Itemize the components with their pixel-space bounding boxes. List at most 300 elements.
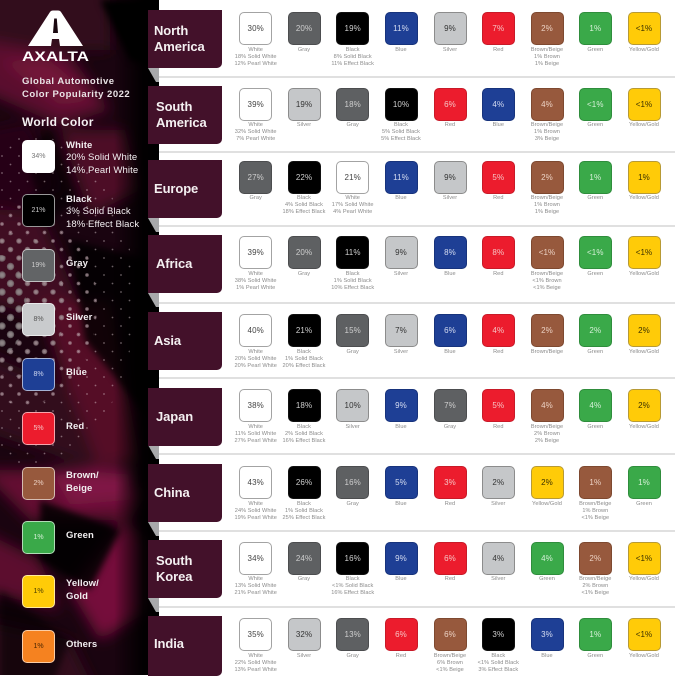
swatch: Silver 2%: Silver [491,501,505,507]
swatch: Silver 32% [276,618,332,660]
legend: White 34%: 20% Solid White [66,152,137,163]
swatch: Silver 2% [470,466,526,508]
legend: Yellow/Gold 1%: Gold [66,590,88,602]
swatch: Black 22%: Black [297,195,311,201]
swatch: Silver 9%: 9% [444,24,456,33]
swatch: White 40%: 20% Solid White [235,356,277,362]
legend: Red 5% [22,412,84,445]
region label: South America: South [156,99,192,114]
swatch: Gray 20% [276,236,332,278]
swatch: Green 1%: 1% [589,630,601,639]
swatch: Black 19% [331,12,374,66]
swatch: Red 7% [482,12,515,52]
swatch: Yellow/Gold <1%: <1% [636,24,652,33]
swatch: Yellow/Gold 1%: 1% [638,173,650,182]
swatch: Brown/Beige 2%: 1% Beige [535,60,559,66]
swatch: Red 6% [434,88,467,128]
swatch: Blue 11%: 11% [393,173,409,182]
swatch: Yellow/Gold <1%: Yellow/Gold [629,122,659,128]
swatch: Green 4%: Green [587,424,603,430]
swatch: Yellow/Gold 2%: Yellow/Gold [629,424,659,430]
swatch: Brown/Beige 4%: 1% Brown [534,129,560,135]
logo: Axalta: AXALTA [22,49,89,64]
swatch: Red 4%: Red [493,349,504,355]
swatch: Brown/Beige 2%: Brown/Beige [531,46,563,52]
legend: Blue 8%: Blue [66,367,87,378]
swatch: Black 19%: 19% [345,24,361,33]
swatch: Green 1%: Green [587,652,603,658]
swatch: Red 8%: 8% [492,248,504,257]
swatch: Green <1% [567,236,623,278]
swatch: Gray 7%: 7% [444,401,456,410]
report title: Color Popularity 2022 [22,89,130,100]
swatch: Black 21%: 1% Solid Black [285,356,323,362]
swatch: Yellow/Gold 2% [616,314,672,356]
swatch: Gray 13% [325,618,381,660]
swatch: Green 1% [616,466,672,508]
swatch: Gray 20%: 20% [296,248,312,257]
swatch: Yellow/Gold <1%: <1% [636,248,652,257]
region label: Europe: Europe [154,181,198,196]
sidebar background: silk and halftone dots [0,0,159,675]
swatch: Silver 32%: 32% [296,630,312,639]
swatch: Black 18%: 16% Effect Black [282,438,325,444]
swatch: Blue 9%: 9% [395,401,407,410]
swatch: Red 6%: 6% [444,554,456,563]
swatch: Brown/Beige 2% [567,542,623,597]
swatch: Yellow/Gold 2%: 2% [638,401,650,410]
legend: Others 1%: Others [66,639,97,650]
region label: China [148,464,222,522]
swatch: Silver 10% [325,389,381,430]
swatch: Green 1%: Green [587,195,603,201]
swatch: Silver 7% [373,314,429,356]
swatch: White 43%: 19% Pearl White [234,515,277,521]
swatch: Red 5%: 5% [492,401,504,410]
swatch: Green 4% [519,542,575,583]
swatch: White 34%: 34% [248,554,264,563]
swatch: Blue 11%: 11% [393,24,409,33]
swatch: Gray 24% [276,542,332,583]
swatch: Blue 11%: Blue [395,195,407,201]
swatch: Red 6% [373,618,429,660]
region label: South America [148,86,222,144]
swatch: Blue 5% [373,466,429,508]
swatch: Black 22% [276,161,332,216]
swatch: Blue 9%: 9% [395,554,407,563]
swatch: Black 21%: 20% Effect Black [282,363,325,369]
swatch: Blue 11%: Blue [395,46,407,52]
swatch: White 35%: 22% Solid White [235,660,277,666]
swatch: Brown/Beige 2%: 1% Brown [534,202,560,208]
swatch: Brown/Beige 4%: 4% [541,100,553,109]
swatch: Blue 11% [385,12,418,52]
swatch: Green 1% [567,161,623,202]
swatch: Yellow/Gold 2%: Yellow/Gold [532,501,562,507]
swatch: Brown/Beige 1%: 1% Brown [582,508,608,514]
swatch: Green <1%: <1% [587,100,604,109]
region label: South America: America [156,115,207,130]
swatch: Black 22%: 4% Solid Black [285,202,323,208]
swatch: Gray 13%: 13% [345,630,361,639]
swatch: White 35%: White [248,652,263,658]
swatch: Brown/Beige 4%: 3% Beige [535,136,559,142]
swatch: Red 5% [470,389,526,430]
swatch: Blue 6%: Blue [444,349,456,355]
swatch: White 30%: 12% Pearl White [234,60,277,66]
swatch: White 21%: 4% Pearl White [333,209,372,215]
swatch: Green 2%: Green [587,349,603,355]
swatch: Green 1%: Green [587,46,603,52]
legend: Yellow/Gold 1%: 1% [33,588,44,595]
swatch: Black 16% [325,542,381,597]
swatch: Black 3% [470,618,526,674]
swatch: Black 26%: 26% [296,478,312,487]
swatch: Silver 9% [434,12,467,52]
legend: Black 21%: 18% Effect Black [66,218,139,230]
swatch: Yellow/Gold 2%: Yellow/Gold [629,349,659,355]
swatch: White 38%: 38% [248,401,264,410]
swatch: Brown/Beige 2% [519,161,575,216]
swatch: Blue 5%: Blue [395,501,407,507]
region label: North America: America [154,39,205,54]
swatch: Silver 32%: Silver [297,652,311,658]
swatch: White 21% [325,161,381,216]
swatch: White 38%: 27% Pearl White [234,438,277,444]
legend: Red 5%: 5% [33,425,44,432]
swatch: Brown/Beige 2%: 2% [541,24,553,33]
swatch: White 40% [228,314,284,370]
swatch: Green 4%: Green [539,576,555,582]
heading: World Color: World Color [22,115,94,129]
legend: White 34%: 34% [31,153,46,160]
swatch: White 39%: White [248,270,263,276]
swatch: Red 4%: 4% [492,326,504,335]
swatch: White 34%: 13% Solid White [235,583,277,589]
swatch: Gray 18%: Gray [347,122,359,128]
swatch: Silver 9%: Silver [443,195,457,201]
swatch: Brown/Beige 1% [567,466,623,522]
swatch: Red 8%: Red [493,270,504,276]
swatch: White 39% [228,236,284,292]
swatch: Silver 2%: 2% [492,478,504,487]
region label: Africa: Africa [156,256,192,271]
legend: Brown/Beige 2% [22,467,99,500]
panel fold: Africa [148,293,159,307]
swatch: Brown/Beige <1%: <1% Beige [533,284,561,290]
swatch: Black 22%: 18% Effect Black [282,209,325,215]
swatch: Gray 15% [325,314,381,356]
swatch: Black 21% [276,314,332,370]
swatch: Red 6%: 6% [444,100,456,109]
legend: White 34%: White [66,140,92,150]
legend: Red 5%: Red [66,421,84,432]
legend: Black 21%: 21% [31,207,46,214]
swatch: White 43%: 24% Solid White [235,508,277,514]
swatch: Red 8% [470,236,526,278]
legend: Silver 8%: Silver [66,312,92,323]
swatch: Red 3%: Red [445,501,455,507]
swatch: White 38%: 11% Solid White [235,430,276,436]
swatch: Brown/Beige 2%: 1% Brown [534,54,560,60]
swatch: Green 2%: 2% [589,326,601,335]
swatch: Green <1%: <1% [587,248,604,257]
swatch: Black 16%: 16% Effect Black [331,590,374,596]
legend: Gray 19%: 19% [31,262,46,269]
region label: India: India [154,636,184,651]
swatch: Gray 27%: 27% [248,173,264,182]
swatch: White 35% [228,618,284,674]
swatch: White 34% [228,542,284,597]
swatch: Black 19%: 8% Solid Black [334,54,372,60]
swatch: White 43%: 43% [248,478,264,487]
legend: Yellow/Gold 1% [22,575,99,608]
swatch: Black 11%: 1% Solid Black [334,278,372,284]
swatch: Gray 27%: Gray [250,195,262,201]
swatch: Brown/Beige 2%: Brown/Beige [531,349,563,355]
swatch: Silver 4%: Silver [491,576,505,582]
swatch: Brown/Beige 4%: Brown/Beige [531,122,563,128]
swatch: Brown/Beige 4%: 2% Beige [535,438,559,444]
swatch: Yellow/Gold 2%: 2% [541,478,553,487]
swatch: Blue 8% [422,236,478,278]
swatch: Brown/Beige 1%: <1% Beige [581,515,609,521]
swatch: Blue 4% [482,88,515,128]
swatch: Silver 9%: 9% [444,173,456,182]
swatch: Blue 3% [519,618,575,660]
swatch: Green 4%: 4% [541,554,553,563]
color row: Europe [239,161,661,215]
region label: Africa [148,235,222,293]
color row: India [159,618,675,678]
swatch: Yellow/Gold 2% [519,466,575,508]
swatch: Brown/Beige 6%: 6% Brown [437,660,463,666]
swatch: Black 16%: Black [346,576,360,582]
panel fold: Europe [148,218,159,232]
swatch: Silver 9%: Silver [443,46,457,52]
swatch: Gray 24%: 24% [296,554,312,563]
swatch: Red 4% [470,314,526,356]
swatch: Brown/Beige 4%: Brown/Beige [531,424,563,430]
legend: Blue 8%: 8% [33,371,44,378]
swatch: Gray 27% [228,161,284,202]
swatch: Brown/Beige 4% [531,88,564,142]
swatch: Red 6%: Red [445,576,455,582]
legend: Brown/Beige 2%: Beige [66,482,92,494]
panel fold: North America [148,68,159,82]
swatch: Gray 24%: Gray [298,576,310,582]
legend: Others 1% [22,630,97,663]
swatch: Black 3%: Black [491,652,505,658]
legend: Blue 8% [22,358,87,391]
region label: North America [148,10,222,68]
panel fold: China [148,522,159,536]
swatch: Red 7%: 7% [492,24,504,33]
swatch: Gray 18% [336,88,369,128]
legend: Gray 19%: Gray [66,258,88,269]
swatch: Red 3%: 3% [444,478,456,487]
swatch: Black 18%: 2% Solid Black [285,430,323,436]
swatch: Black 11%: 11% [345,248,361,257]
swatch: Gray 13%: Gray [347,652,359,658]
region label: South Korea: South [156,553,192,568]
legend: Brown/Beige 2%: 2% [33,480,44,487]
swatch: Green <1%: Green [587,270,603,276]
swatch: Yellow/Gold <1% [616,618,672,660]
swatch: Red 6%: Red [445,122,455,128]
swatch: Brown/Beige 6%: <1% Beige [436,666,464,672]
swatch: Brown/Beige 4%: 4% [541,401,553,410]
swatch: Blue 5%: 5% [395,478,407,487]
swatch: Silver 9% [373,236,429,278]
swatch: White 21%: 21% [345,173,361,182]
swatch: Gray 7%: Gray [444,424,456,430]
swatch: Blue 6% [422,314,478,356]
swatch: Black 18% [276,389,332,444]
swatch: Yellow/Gold <1% [628,88,661,128]
legend: Yellow/Gold 1%: Yellow/ [66,578,99,589]
swatch: Red 5%: Red [493,424,504,430]
swatch: Brown/Beige 2% [531,12,564,66]
swatch: Blue 8%: 8% [444,248,456,257]
swatch: White 35%: 35% [248,630,264,639]
color row: Asia [159,314,675,374]
legend: Black 21% [22,194,140,230]
swatch: Gray 20%: Gray [298,270,310,276]
swatch: Black 22%: 22% [296,173,312,182]
swatch: Black 10%: 10% [393,100,409,109]
swatch: Blue 9% [373,542,429,583]
legend: Black 21%: Black [66,194,92,204]
swatch: Black 21%: 21% [296,326,312,335]
region label: India [148,616,222,676]
swatch: Silver 9% [422,161,478,202]
swatch: Blue 4%: 4% [492,100,504,109]
swatch: Black 11% [325,236,381,292]
swatch: Silver 4% [470,542,526,583]
swatch: Silver 19% [288,88,321,128]
swatch: White 21%: 17% Solid White [332,202,374,208]
swatch: Black 21%: Black [297,349,311,355]
swatch: White 43%: White [248,501,263,507]
swatch: Black 26%: 1% Solid Black [285,508,323,514]
legend: Green 1% [22,521,94,554]
swatch: White 30%: 18% Solid White [235,54,277,60]
swatch: Brown/Beige 2%: 1% Beige [535,209,559,215]
swatch: Black 18%: 18% [296,401,312,410]
legend: Green 1%: 1% [33,534,44,541]
swatch: Black 18%: Black [297,424,311,430]
legend: Gray 19% [22,249,88,282]
swatch: Silver 19%: 19% [296,100,312,109]
swatch: White 34%: White [248,576,263,582]
swatch: Yellow/Gold <1% [628,12,661,52]
swatch: Silver 4%: 4% [492,554,504,563]
swatch: Silver 19%: Silver [297,122,311,128]
legend: Green 1%: Green [66,530,94,541]
swatch: Brown/Beige 6% [422,618,478,674]
swatch: Green 4%: 4% [589,401,601,410]
swatch: Black 3%: 3% Effect Black [478,666,518,672]
swatch: Silver 9%: 9% [395,248,407,257]
legend: Silver 8%: 8% [33,316,44,323]
swatch: Green 1%: 1% [589,173,601,182]
swatch: White 40%: 20% Pearl White [234,363,277,369]
swatch: Black 10%: Black [394,122,408,128]
color row: Japan [159,389,675,449]
swatch: Blue 9% [373,389,429,430]
swatch: Gray 18%: 18% [345,100,361,109]
swatch: Brown/Beige 1%: Brown/Beige [579,501,611,507]
swatch: Brown/Beige 2%: 2% [589,554,601,563]
swatch: White 30%: 30% [248,24,264,33]
region label: Asia: Asia [154,333,181,348]
swatch: Silver 7%: Silver [394,349,408,355]
swatch: Black 10%: 5% Effect Black [381,136,421,142]
swatch: Yellow/Gold <1%: <1% [636,100,652,109]
swatch: Green 1% [579,12,612,52]
swatch: Blue 11% [373,161,429,202]
swatch: Blue 9%: Blue [395,576,407,582]
swatch: Gray 20% [288,12,321,52]
swatch: Yellow/Gold <1% [616,542,672,583]
swatch: Brown/Beige 6%: 6% [444,630,456,639]
swatch: Black 11%: Black [346,270,360,276]
swatch: White 39%: 39% [248,248,264,257]
swatch: White 40%: White [248,349,263,355]
report title [22,76,130,100]
swatch: Gray 15%: 15% [345,326,361,335]
swatch: Silver 10%: Silver [346,424,360,430]
swatch: Brown/Beige 2%: 2% Brown [582,583,608,589]
swatch: Red 6%: 6% [395,630,407,639]
swatch: Brown/Beige 4%: 2% Brown [534,430,560,436]
swatch: Yellow/Gold 2% [616,389,672,430]
swatch: Brown/Beige 2%: Brown/Beige [579,576,611,582]
swatch: Silver 7%: 7% [395,326,407,335]
region label: Asia [148,312,222,370]
swatch: Brown/Beige <1%: Brown/Beige [531,270,563,276]
swatch: Blue 3%: Blue [541,652,553,658]
legend: Others 1%: 1% [33,643,44,650]
swatch: White 35%: 13% Pearl White [234,666,277,672]
swatch: Yellow/Gold <1%: <1% [636,554,652,563]
panel fold: Japan [148,446,159,459]
swatch: Black 11%: 10% Effect Black [331,284,374,290]
swatch: White 30%: White [248,46,263,52]
swatch: Yellow/Gold 2%: 2% [638,326,650,335]
swatch: Red 7%: Red [493,46,504,52]
swatch: Gray 20%: 20% [296,24,312,33]
swatch: Brown/Beige 2%: 2% [541,326,553,335]
swatch: Black 10% [381,88,421,142]
swatch: Silver 10%: 10% [345,401,361,410]
swatch: Blue 4%: Blue [493,122,504,128]
swatch: Brown/Beige <1% [519,236,575,292]
swatch: Brown/Beige <1%: <1% [539,248,555,257]
swatch: Yellow/Gold <1%: Yellow/Gold [629,270,659,276]
swatch: Green <1% [579,88,612,128]
swatch: White 39%: White [248,122,263,128]
region label: Japan [148,388,222,446]
swatch: Black 26%: Black [297,501,311,507]
swatch: Brown/Beige 2%: 2% [541,173,553,182]
legend: White 34%: 14% Pearl White [66,164,138,176]
swatch: White 38%: White [248,424,263,430]
swatch: Red 6%: Red [396,652,406,658]
swatch: Green 1%: 1% [589,24,601,33]
swatch: White 30% [234,12,277,66]
